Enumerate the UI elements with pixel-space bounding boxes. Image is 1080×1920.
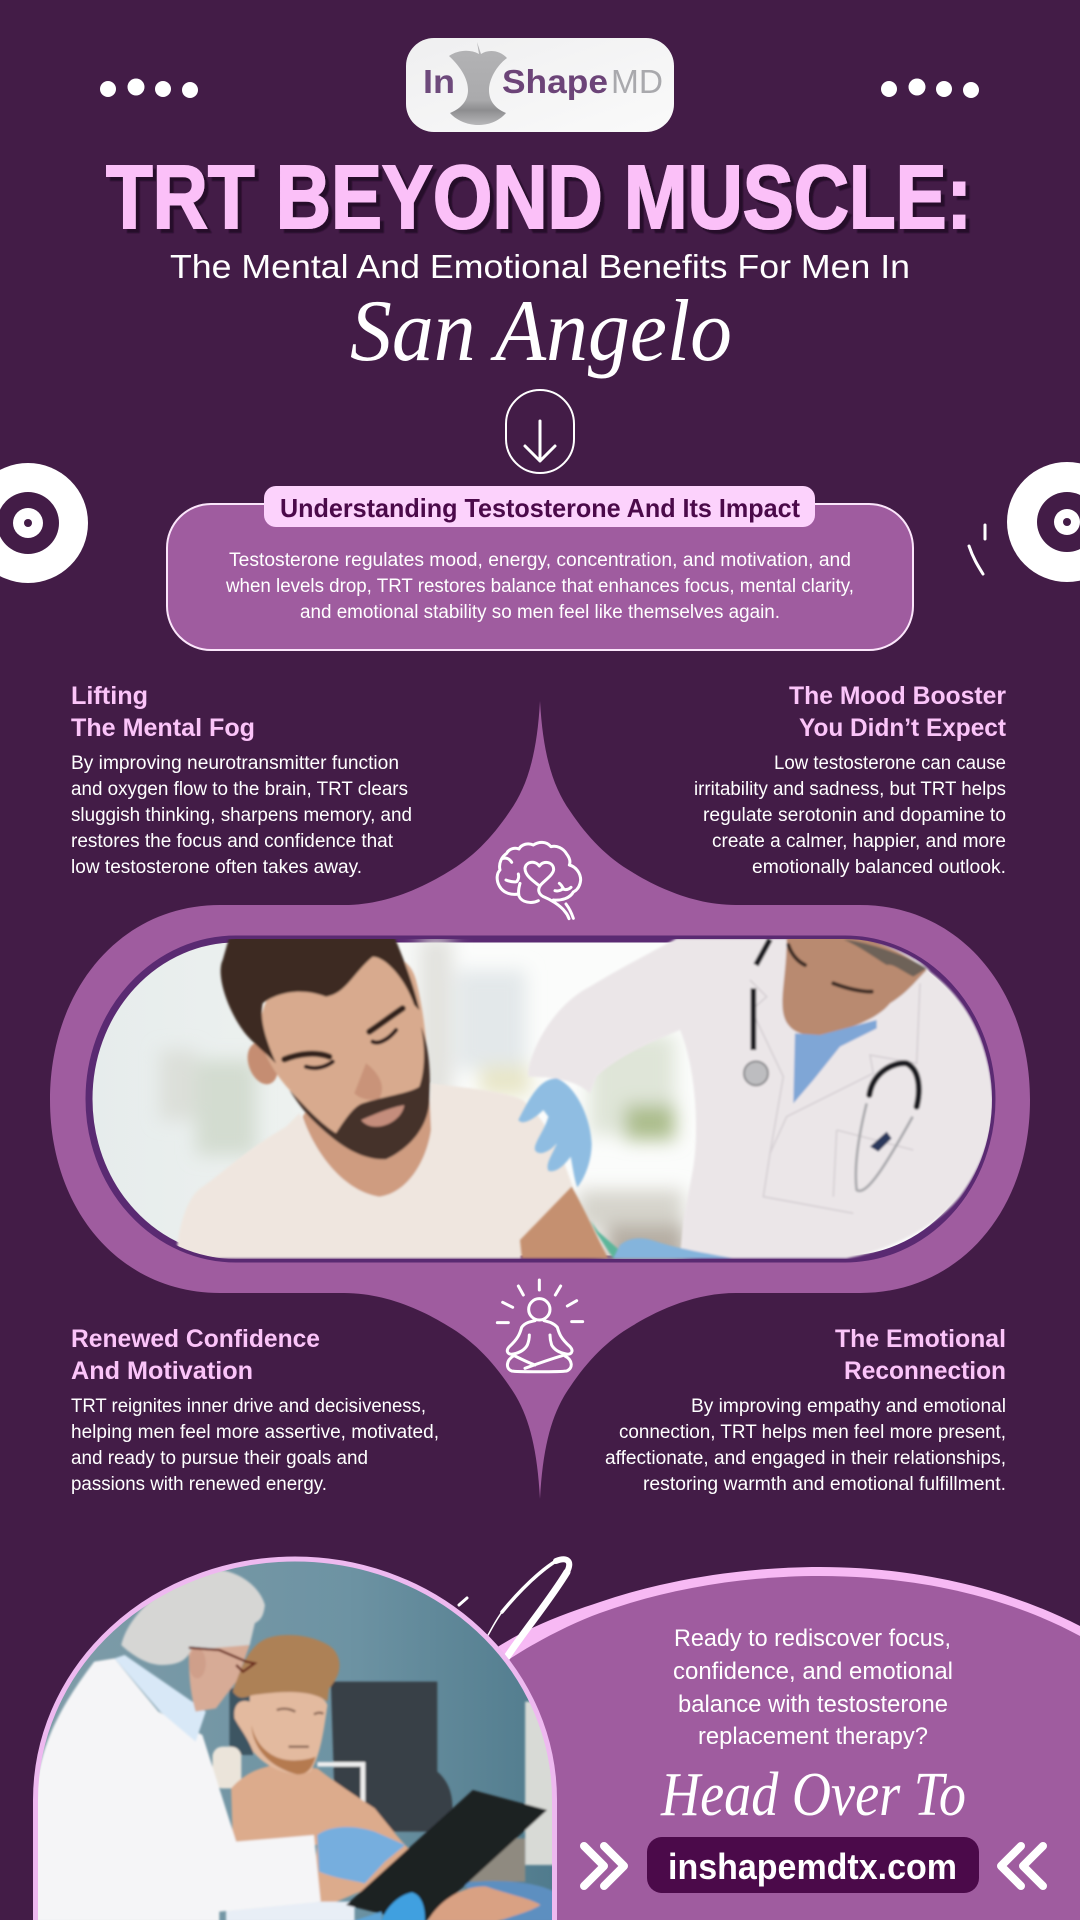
logo: MD [611,63,663,100]
patient face [260,956,427,1133]
heading: Renewed Confidence [71,1325,320,1353]
cta question: balance with testosterone [678,1691,948,1718]
website button: inshapemdtx.com [668,1846,957,1887]
cta question: Ready to rediscover focus, [674,1625,951,1652]
heading: The Mood Booster [789,682,1006,710]
coat lapel lines [750,980,920,1213]
body: TRT reignites inner drive and decisiveness, [71,1396,426,1417]
body: helping men feel more assertive, motivated, [71,1422,439,1443]
text block: the emotional reconnection [605,1325,1006,1495]
body [71,753,412,878]
icon: brain with heart [497,842,581,919]
heading [789,682,1007,742]
patient torso [231,1765,409,1908]
body: restoring warmth and emotional fulfillment. [643,1474,1006,1495]
patient beard [289,1027,430,1159]
body: and ready to pursue their goals and [71,1448,368,1469]
logo [406,38,674,132]
heading: Reconnection [844,1357,1006,1385]
pillow and frame [213,1747,241,1788]
patient hair [221,937,419,1063]
blue glove fingers [382,1892,425,1920]
body [605,1396,1006,1495]
body: low testosterone often takes away. [71,857,362,878]
decorative dots left [100,78,198,98]
decorative dots right [881,78,979,98]
patient ear [246,1042,278,1086]
body text: Testosterone regulates mood, energy, concentration, and motivation, and [229,550,851,571]
body: restores the focus and confidence that [71,831,394,852]
patient hand [427,1886,540,1920]
flourish [459,1559,569,1657]
patient face [234,1684,327,1774]
jeans [463,1881,554,1920]
decorative ticks [969,525,985,574]
text block: renewed confidence [71,1325,439,1495]
doctor and window foreground [518,937,993,1258]
dark sofa [331,1682,453,1832]
cta question: replacement therapy? [698,1723,928,1750]
website button [647,1837,979,1893]
doctor hair [843,939,927,977]
white furniture [522,1700,552,1866]
heading [71,1325,320,1385]
body text: when levels drop, TRT restores balance that enhances focus, mental clarity, [225,576,854,597]
photo: doctor with patient and clipboard [30,1550,560,1920]
body: emotionally balanced outlook. [752,857,1006,878]
doctor eyes and brows [788,945,872,992]
patient features [277,1709,323,1747]
icon: chevrons left [1001,1846,1043,1886]
central frame shape [50,701,1030,1499]
heading [835,1325,1006,1385]
heading: And Motivation [71,1357,253,1385]
body: create a calmer, happier, and more [712,831,1006,852]
heading: The Mental Fog [71,714,255,742]
doctor face [189,1645,250,1712]
patient arm [520,1187,608,1258]
stethoscope [744,939,919,1191]
panel: call to action [459,1559,1080,1920]
body: Low testosterone can cause [774,753,1006,774]
body: connection, TRT helps men feel more present, [619,1422,1006,1443]
patient brows and eyes [284,1008,403,1068]
heading: Lifting [71,682,148,710]
doctor collar [115,1655,206,1742]
script location: San Angelo [350,283,732,380]
cta question: confidence, and emotional [673,1658,953,1685]
logo: In [423,63,455,100]
clipboard [346,1790,547,1920]
target decoration right [1007,462,1080,582]
doctor face [782,937,927,1035]
body: By improving neurotransmitter function [71,753,399,774]
patient beard [251,1725,316,1774]
doctor shirt [793,1020,877,1103]
arch border [36,1559,554,1920]
icon: chevrons right [584,1846,624,1886]
heading pill: Understanding Testosterone And Its Impact [280,493,800,523]
icon: meditating figure [497,1280,583,1372]
patient hair [233,1635,339,1702]
body [694,753,1006,878]
syringe [590,1221,619,1258]
lower white sheet [226,1902,354,1920]
heading: You Didn’t Expect [799,714,1007,742]
body [71,1396,439,1495]
body: sluggish thinking, sharpens memory, and [71,805,412,826]
glove on shoulder [518,1078,592,1187]
doctor coat [35,1658,321,1920]
body: passions with renewed energy. [71,1474,327,1495]
subtitle: The Mental And Emotional Benefits For Men In [170,248,910,285]
patient [176,937,573,1258]
text block: lifting the mental fog [71,682,412,878]
body text [225,550,854,623]
glove with syringe [613,1238,733,1258]
script heading: Head Over To [660,1761,966,1829]
floor [469,1838,525,1882]
photo: patient receiving injection from doctor [89,937,993,1265]
patient shirt [176,1083,573,1258]
patient mouth [361,1105,404,1127]
wall [30,1550,560,1920]
body: irritability and sadness, but TRT helps [694,779,1006,800]
text block: the mood booster [694,682,1007,878]
patient nose shadow [354,1063,382,1100]
doctor ear [189,1648,206,1678]
patient neck [303,1090,431,1197]
doctor hair [121,1569,265,1665]
body: and oxygen flow to the brain, TRT clears [71,779,408,800]
body: regulate serotonin and dopamine to [703,805,1006,826]
heading [71,682,255,742]
logo: Shape [502,63,608,100]
room background [160,938,686,1265]
target decoration left [0,463,88,583]
cta question [673,1625,953,1750]
glove [317,1827,405,1883]
pocket pens [870,1132,892,1152]
panel: understanding testosterone [167,486,913,650]
coat [528,938,993,1258]
icon: down arrow pill [506,390,574,473]
body: By improving empathy and emotional [691,1396,1006,1417]
body text: and emotional stability so men feel like themselves again. [300,602,780,623]
glasses [189,1648,255,1672]
heading: The Emotional [835,1325,1006,1353]
body: affectionate, and engaged in their relationships, [605,1448,1006,1469]
